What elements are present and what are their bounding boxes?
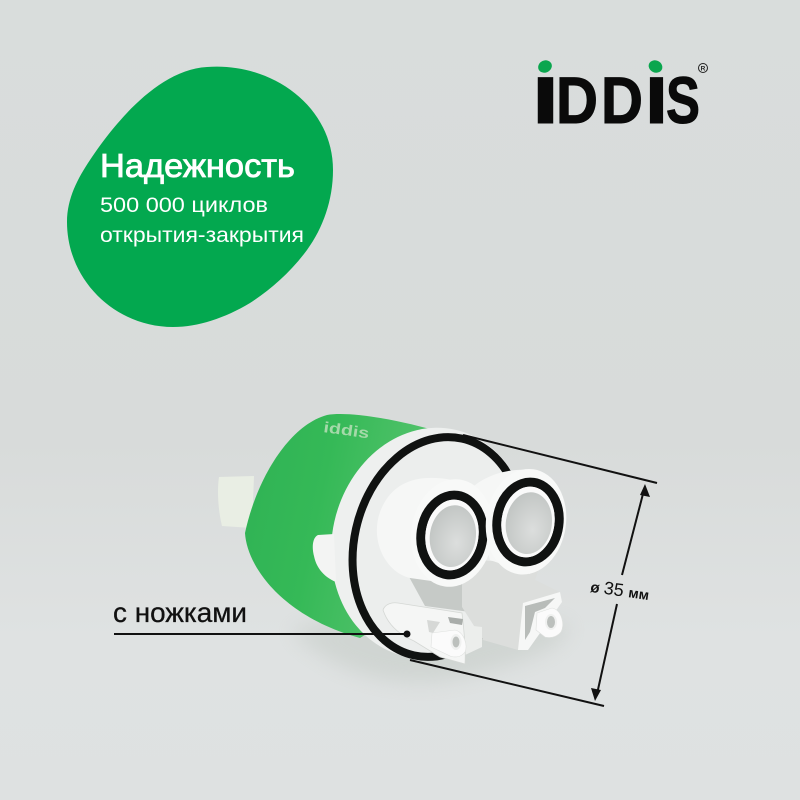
right tube barrel (470, 470, 530, 574)
label: with legs: с ножками (113, 597, 247, 628)
arrow up (622, 484, 650, 575)
embossed brand on body: iddis (322, 419, 370, 442)
text: cycles count: 500 000 циклов (100, 194, 268, 217)
right housing opening (525, 598, 555, 640)
heading: reliability: Надежность (100, 147, 295, 184)
left tube front (404, 474, 500, 592)
dimension: 35 mm (410, 435, 657, 706)
left nipple (431, 630, 466, 657)
logo: IDDIS: S (666, 63, 700, 137)
product: cartridge (218, 409, 573, 677)
left foot triangle mark (427, 620, 440, 633)
logo: IDDIS: I (532, 63, 559, 137)
shaded recess under tubes (408, 575, 470, 612)
logo: IDDIS: D (601, 63, 643, 137)
text: open-close: открытия-закрытия (100, 224, 304, 247)
dimension text: ø 35 мм (589, 576, 651, 604)
leader line with dot (114, 630, 410, 638)
left foot slot (448, 617, 463, 625)
product shadow (290, 600, 570, 683)
green body (245, 414, 440, 638)
arrow down (591, 604, 617, 701)
logo: IDDIS (532, 58, 708, 137)
link between housings (465, 625, 482, 655)
white rim (309, 409, 551, 677)
rim notch (313, 534, 336, 582)
logo: IDDIS: R (701, 66, 706, 72)
logo: IDDIS: I (645, 63, 668, 137)
left foot (383, 603, 465, 664)
right housing front face (518, 592, 562, 650)
back tab (218, 476, 254, 528)
right housing (462, 560, 562, 650)
black o-ring (332, 420, 544, 674)
green blob with heading (67, 67, 333, 327)
logo: IDDIS: D (556, 63, 598, 137)
right nipple (536, 608, 563, 637)
left tube barrel (377, 478, 460, 585)
right tube front (479, 464, 573, 580)
